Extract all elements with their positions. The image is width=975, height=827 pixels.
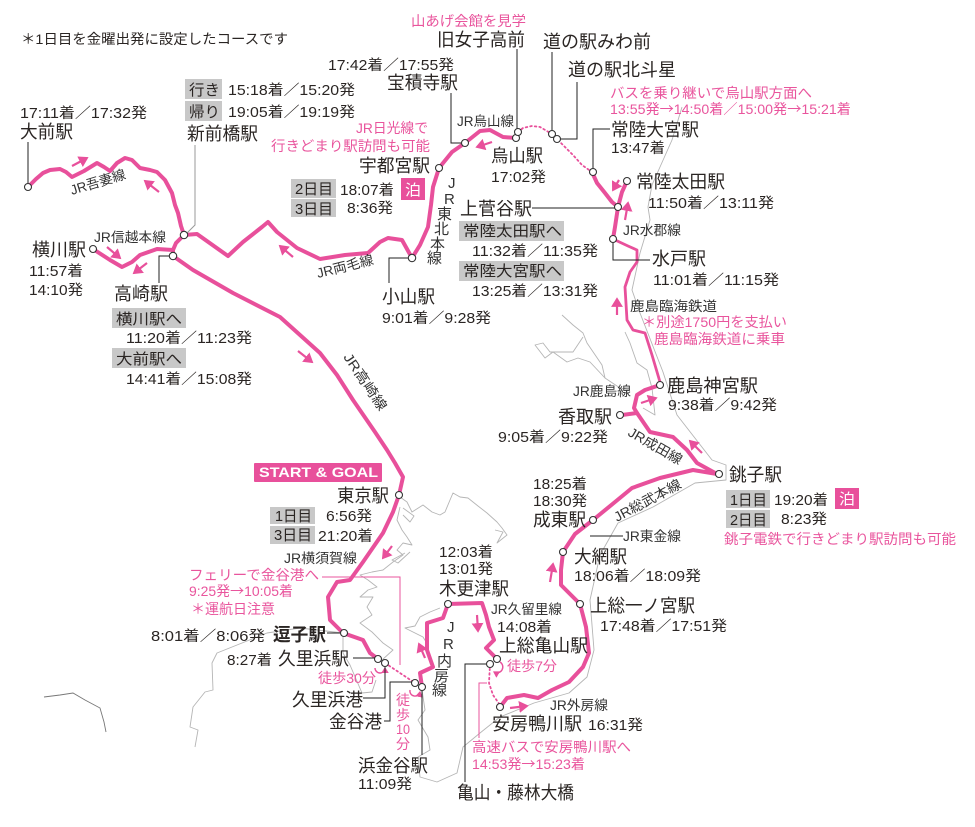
station: 銚子駅: 2日目 (730, 512, 767, 529)
callout: バス乗り継ぎ: バスを乗り継いで烏山駅方面へ (610, 85, 812, 101)
station: 横川駅: 11:57着 (29, 263, 83, 280)
station: 常陸太田駅 (636, 172, 775, 212)
label: 久里浜港: 久里浜港 (292, 690, 363, 710)
station: 宇都宮駅: 8:36発 (347, 200, 394, 217)
station: 高崎駅: 14:41着／15:08発 (126, 371, 253, 388)
station: 上菅谷駅: 11:32着／11:35発 (472, 243, 599, 260)
walk note: 徒歩10分 (396, 692, 410, 752)
walk note: 徒歩10分: 分 (396, 736, 410, 752)
callout: バス乗り継ぎ (610, 85, 851, 119)
label: 旧女子高前: 旧女子高前 (437, 30, 525, 50)
station: 横川駅 (29, 240, 86, 299)
line label: JR水郡線: JR水郡線 (623, 223, 682, 238)
walk note: 徒歩10分: 歩 (396, 707, 410, 723)
station: 成東駅: 成東駅 (533, 510, 586, 530)
station: 常陸大宮駅: 13:47着 (611, 140, 665, 157)
callout: 山あげ会館を見学: 山あげ会館を見学 (411, 13, 526, 29)
station: 宝積寺駅 (328, 57, 458, 93)
station: 東京駅 (270, 486, 389, 545)
station: 新前橋駅: 15:18着／15:20発 (228, 82, 356, 99)
station: 高崎駅: 横川駅へ (116, 311, 182, 328)
station: 宇都宮駅: 2日目 (295, 181, 333, 198)
station: 横川駅: 14:10発 (29, 282, 84, 299)
callout: 高速バス: 高速バスで安房鴨川駅へ (472, 739, 631, 755)
line label: JR高崎線: JR高崎線 (341, 350, 391, 414)
station: 久里浜駅 (227, 649, 349, 669)
station: 成東駅: 18:25着 (533, 476, 587, 493)
station: 安房鴨川駅: 安房鴨川駅 (492, 714, 582, 734)
station: 上菅谷駅: 13:25着／13:31発 (472, 283, 599, 300)
callout: JR日光線 (271, 120, 430, 154)
note: ＊1日目を金曜出発に設定したコースです (21, 31, 288, 47)
line label: JR内房線 (432, 619, 454, 699)
station: 常陸太田駅: 常陸太田駅 (636, 172, 725, 192)
station: 宝積寺駅: 宝積寺駅 (387, 73, 458, 93)
line label: JR両毛線: JR両毛線 (315, 252, 375, 281)
station: 上総亀山駅: 上総亀山駅 (499, 636, 588, 656)
station: 上菅谷駅 (459, 199, 599, 300)
station: 久里浜駅: 久里浜駅 (278, 649, 349, 669)
station: 大網駅: 18:06着／18:09発 (574, 568, 702, 585)
callout: フェリー: ＊運航日注意 (191, 601, 275, 617)
station: 水戸駅: 11:01着／11:15発 (653, 272, 780, 289)
station: 大前駅: 17:11着／17:32発 (20, 105, 148, 122)
line label: JR吾妻線: JR吾妻線 (68, 167, 128, 198)
station: 浜金谷駅: 11:09発 (358, 776, 413, 793)
station: 烏山駅: 烏山駅 (491, 146, 543, 166)
callout: 別途料金: 鹿島臨海鉄道に乗車 (654, 331, 785, 347)
station: 新前橋駅: 19:05着／19:19発 (228, 104, 356, 121)
line label: JR内房線: J (447, 619, 454, 636)
line label: JR総武本線: JR総武本線 (611, 476, 684, 525)
label: START & GOAL: START & GOAL (259, 464, 378, 480)
callout: フェリー: 9:25発→10:05着 (189, 581, 293, 601)
station: 浜金谷駅 (358, 756, 428, 793)
station: 銚子駅: 8:23発 (781, 511, 828, 528)
station: 水戸駅: 水戸駅 (652, 249, 706, 269)
callout: フェリー: フェリーで金谷港へ (189, 567, 319, 583)
station: 銚子駅: 銚子駅 (729, 465, 782, 485)
station: 宇都宮駅: 3日目 (295, 201, 333, 218)
label: 道の駅みわ前: 道の駅みわ前 (543, 32, 651, 52)
coastline map (44, 107, 726, 782)
line label: 鹿島臨海鉄道: 鹿島臨海鉄道 (630, 299, 718, 314)
line label: JR東北本線: R (444, 191, 455, 208)
station: 宇都宮駅 (291, 156, 430, 218)
station: 烏山駅 (491, 146, 547, 186)
station: 香取駅 (498, 407, 612, 446)
callout: JR日光線: JR日光線で (356, 120, 428, 136)
line label: JR東金線: JR東金線 (623, 529, 682, 544)
station: 銚子駅: 19:20着 (774, 492, 828, 509)
station: 東京駅: 東京駅 (337, 486, 389, 506)
line label: JR内房線: R (443, 636, 454, 653)
station: 香取駅: 香取駅 (558, 407, 612, 427)
station: 上菅谷駅: 常陸太田駅へ (463, 223, 562, 240)
station: 銚子駅: 泊 (839, 491, 855, 508)
station: 高崎駅: 高崎駅 (114, 284, 168, 304)
callout: 別途料金 (642, 314, 787, 347)
station: 横川駅: 横川駅 (32, 240, 86, 260)
line label: JR横須賀線: JR横須賀線 (284, 551, 358, 566)
line label: JR内房線: 線 (432, 682, 447, 699)
station: 上総亀山駅 (497, 619, 588, 656)
walk note: 徒歩10分: 徒 (396, 692, 410, 708)
station: 木更津駅: 13:01発 (439, 561, 494, 578)
label: START & GOAL (254, 463, 382, 482)
station: 鹿島神宮駅: 9:38着／9:42発 (668, 397, 778, 414)
station: 成東駅 (533, 476, 588, 530)
station: 新前橋駅 (185, 79, 356, 144)
station: 安房鴨川駅 (492, 714, 644, 734)
leader lines (28, 49, 650, 782)
station: 逗子駅: 逗子駅 (273, 625, 326, 645)
station: 香取駅: 9:05着／9:22発 (498, 429, 609, 446)
station: 上総亀山駅: 14:08着 (497, 619, 552, 636)
line label: JR鹿島線: JR鹿島線 (573, 384, 632, 399)
station: 上菅谷駅: 常陸大宮駅へ (463, 263, 562, 280)
station: 東京駅: 6:56発 (326, 508, 373, 525)
line label: JR久留里線: JR久留里線 (491, 602, 563, 617)
station: 木更津駅 (439, 544, 509, 599)
station: 宝積寺駅: 17:42着／17:55発 (328, 57, 455, 74)
walk note: 徒歩10分: 10 (396, 721, 410, 737)
callout: バス乗り継ぎ: 13:55発→14:50着／15:00発→15:21着 (610, 99, 851, 119)
station: 鹿島神宮駅: 鹿島神宮駅 (667, 376, 758, 396)
station: 銚子駅 (724, 465, 956, 547)
line label: JR烏山線: JR烏山線 (457, 113, 514, 129)
station: 宇都宮駅: 18:07着 (340, 182, 394, 199)
station: 久里浜駅: 8:27着 (227, 652, 272, 669)
line label: JR東北本線: J (448, 175, 456, 192)
line label: JR信越本線: JR信越本線 (94, 230, 167, 245)
line label: JR内房線: 房 (434, 668, 449, 685)
station: 小山駅: 9:01着／9:28発 (382, 310, 492, 327)
station: 烏山駅: 17:02発 (491, 169, 547, 186)
callout: 高速バス (472, 739, 631, 774)
station: 大網駅 (574, 547, 702, 585)
station: 鹿島神宮駅 (667, 376, 778, 414)
walk note: 徒歩30分: 徒歩30分 (318, 670, 376, 686)
label: 道の駅北斗星: 道の駅北斗星 (568, 60, 676, 80)
line label: JR外房線: JR外房線 (550, 698, 609, 713)
route line (28, 126, 717, 707)
line label: JR東北本線: 北 (434, 221, 449, 238)
station: 安房鴨川駅: 16:31発 (588, 717, 644, 734)
line label: JR内房線: 内 (437, 653, 452, 670)
station: 高崎駅: 11:20着／11:23発 (126, 330, 253, 347)
label: 亀山・藤林大橋: 亀山・藤林大橋 (457, 783, 574, 803)
station: 東京駅: 21:20着 (318, 528, 373, 545)
station: 銚子駅: 1日目 (730, 492, 767, 509)
station: 成東駅: 18:30発 (533, 493, 588, 510)
line label: JR東北本線: 本 (430, 236, 445, 253)
station: 上菅谷駅: 上菅谷駅 (460, 199, 532, 219)
callout: 別途料金: ＊別途1750円を支払い (642, 314, 787, 330)
station: 上総一ノ宮駅: 上総一ノ宮駅 (590, 596, 695, 616)
station: 東京駅: 1日目 (275, 508, 312, 525)
station: 逗子駅 (151, 625, 326, 645)
station: 高崎駅: 大前駅へ (116, 351, 182, 368)
station: 小山駅: 小山駅 (382, 287, 435, 307)
station: 小山駅 (382, 287, 492, 327)
station: 大前駅: 大前駅 (20, 122, 73, 142)
station: 常陸大宮駅 (611, 120, 699, 157)
station: 高崎駅 (112, 284, 253, 388)
station: 新前橋駅: 帰り (189, 103, 220, 121)
station: 東京駅: 3日目 (274, 527, 312, 544)
callout: JR日光線: 行きどまり駅訪問も可能 (271, 138, 430, 154)
station: 大網駅: 大網駅 (574, 547, 627, 567)
station: 宇都宮駅: 泊 (405, 182, 421, 199)
station: 常陸大宮駅: 常陸大宮駅 (611, 120, 699, 140)
walk note: 徒歩7分: 徒歩7分 (507, 658, 557, 674)
label: 金谷港: 金谷港 (329, 712, 382, 732)
station: 木更津駅: 木更津駅 (439, 579, 509, 599)
station: 上総一ノ宮駅: 17:48着／17:51発 (600, 618, 728, 635)
station: 逗子駅: 8:01着／8:06発 (151, 628, 266, 645)
station markers (24, 128, 722, 710)
station: 宇都宮駅: 宇都宮駅 (359, 156, 430, 176)
direction arrows (72, 142, 702, 708)
station: 上総一ノ宮駅 (590, 596, 728, 635)
callout: フェリー (189, 567, 319, 617)
line label: JR成田線: JR成田線 (626, 425, 685, 468)
line label: JR東北本線: 東 (437, 206, 452, 223)
station: 銚子駅: 銚子電鉄で行きどまり駅訪問も可能 (724, 531, 956, 547)
station: 浜金谷駅: 浜金谷駅 (358, 756, 428, 776)
station: 水戸駅 (652, 249, 780, 289)
line label: JR東北本線 (427, 175, 456, 267)
callout: 高速バス: 14:53発→15:23着 (472, 754, 585, 774)
station: 木更津駅: 12:03着 (439, 544, 493, 561)
station: 大前駅 (20, 105, 148, 142)
line label: JR東北本線: 線 (427, 250, 442, 267)
station: 新前橋駅: 行き (189, 82, 220, 99)
station: 常陸太田駅: 11:50着／13:11発 (648, 195, 775, 212)
station: 新前橋駅: 新前橋駅 (187, 124, 258, 144)
